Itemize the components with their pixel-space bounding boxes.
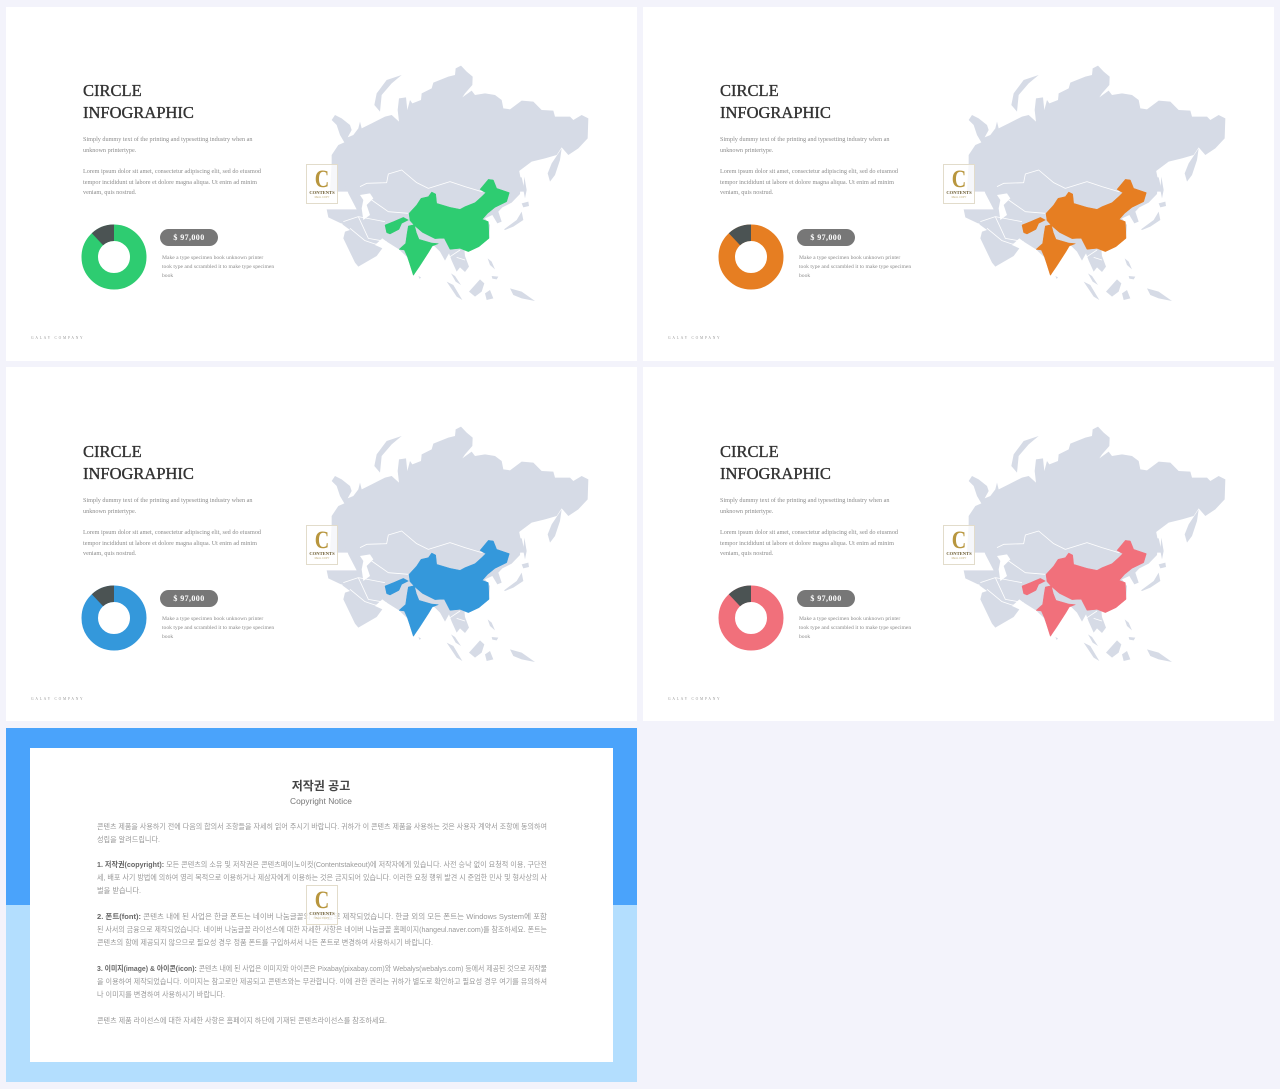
caption: book: [162, 273, 173, 279]
value pill: [797, 590, 855, 607]
title: CIRCLE: [720, 442, 779, 461]
map: Asia orange highlight: [964, 66, 1226, 301]
intro text: [83, 136, 252, 154]
intro text: Simply dummy text of the printing and typesetting industry when an: [720, 136, 889, 143]
value pill: [797, 229, 855, 246]
logo watermark: REAL COPY: [952, 196, 966, 199]
logo watermark: C: [315, 527, 329, 554]
caption: took type and scrambled it to make type specimen: [799, 264, 911, 270]
body text: tempor incididunt ut labore et dolore magna aliqua. Ut enim ad minim: [720, 178, 894, 186]
donut chart: [82, 224, 146, 290]
caption: took type and scrambled it to make type specimen: [162, 625, 274, 631]
footer: GALAY COMPANY: [31, 697, 84, 701]
notice heading: 저작권 공고: [292, 778, 350, 793]
title: INFOGRAPHIC: [83, 103, 194, 122]
logo watermark: CONTENTS: [946, 551, 972, 556]
footer: GALAY COMPANY: [31, 336, 84, 340]
body text: [720, 529, 898, 557]
panel: orange slide: [643, 7, 1274, 361]
value pill: $ 97,000: [810, 594, 842, 603]
intro text: [720, 497, 890, 514]
donut chart: [718, 224, 784, 290]
title: INFOGRAPHIC: [720, 103, 831, 122]
logo watermark: C: [952, 527, 966, 554]
caption: took type and scrambled it to make type specimen: [799, 625, 911, 631]
caption: took type and scrambled it to make type specimen: [162, 264, 274, 270]
logo watermark: [943, 525, 975, 565]
caption: [799, 255, 911, 279]
intro text: unknown printertype.: [83, 508, 136, 514]
clause 3: 3. 이미지(image) & 아이콘(icon): 콘텐츠 내에 된 사업은 이미지와 아이콘은 Pixabay(pixabay.com)와 Webalys(webalys.com) 등에서 제공된 것으로 저작물: [97, 963, 547, 973]
closing line: 콘텐츠 제품 라이선스에 대한 자세한 사항은 홈페이지 하단에 기재된 콘텐츠라이선스를 참조하세요.: [97, 1015, 387, 1025]
title: INFOGRAPHIC: [83, 464, 194, 483]
clause 1: 세, 배포 사기 방법에 의하여 영리 목적으로 이용하거나 제삼자에게 이용하는 것은 금지되어 있습니다. 이러한 요청 행위 발견 시 준엄한 민사 및 형사상의 사: [97, 872, 547, 882]
logo watermark: REAL COPY: [315, 917, 329, 920]
logo watermark: CONTENTS: [309, 551, 335, 556]
logo watermark: REAL COPY: [315, 196, 329, 199]
body text: [83, 529, 261, 557]
logo watermark: C: [315, 166, 329, 193]
body text: Lorem ipsum dolor sit amet, consectetur adipiscing elit, sed do eiusmod: [720, 529, 898, 536]
caption: Make a type specimen book unknown printer: [799, 616, 900, 622]
intro text: unknown printertype.: [720, 508, 773, 514]
title: [83, 442, 194, 483]
intro paragraph: [97, 821, 547, 844]
intro paragraph: 성립을 알려드립니다.: [97, 834, 160, 844]
logo watermark: CONTENTS: [309, 911, 335, 916]
panel: coral slide: [643, 367, 1274, 721]
panel: copyright notice: [6, 728, 637, 1082]
clause 2: 2. 폰트(font): 콘텐츠 내에 된 사업은 한글 폰트는 네이버 나눔글꼴의 저작물로 제작되었습니다. 한글 외의 모든 폰트는 Windows System에 포함: [97, 911, 547, 921]
caption: [799, 616, 911, 640]
logo watermark: CONTENTS: [946, 190, 972, 195]
clause 3: 을 이용하여 제작되었습니다. 이미지는 참고로만 제공되고 콘텐츠와는 무관합니다. 이에 관한 권리는 귀하가 별도로 확인하고 필요성 경우 여기를 유의하셔: [97, 976, 547, 986]
value pill: $ 97,000: [810, 233, 842, 242]
map: Asia green highlight: [326, 66, 588, 301]
logo watermark: REAL COPY: [952, 557, 966, 560]
body text: [720, 168, 898, 196]
title: INFOGRAPHIC: [720, 464, 831, 483]
clause 2: 된 사서의 금융으로 제작되었습니다. 네이버 나눔글꼴 라이선스에 대한 자세한 사항은 네이버 나눔글꼴 홈페이지(hangeul.naver.com)를 참조하세요. 폰트는: [97, 924, 547, 934]
body text: veniam, quis nostrud.: [83, 550, 136, 557]
value pill: $ 97,000: [173, 594, 205, 603]
map: Asia blue highlight: [326, 426, 588, 662]
body text: veniam, quis nostrud.: [720, 550, 773, 557]
title: CIRCLE: [83, 81, 142, 100]
clause 3: [97, 963, 547, 999]
caption: [162, 616, 274, 640]
donut chart: [82, 586, 146, 650]
value pill: [160, 229, 218, 246]
notice subheading: Copyright Notice: [290, 796, 352, 806]
intro text: Simply dummy text of the printing and typesetting industry when an: [83, 136, 252, 143]
body text: tempor incididunt ut labore et dolore magna aliqua. Ut enim ad minim: [720, 540, 894, 546]
clause 1: [97, 859, 547, 895]
body text: [83, 168, 261, 196]
body text: tempor incididunt ut labore et dolore magna aliqua. Ut enim ad minim: [83, 178, 257, 186]
logo watermark: CONTENTS: [309, 190, 335, 195]
body text: Lorem ipsum dolor sit amet, consectetur adipiscing elit, sed do eiusmod: [83, 168, 261, 175]
clause 1: 벌을 받습니다.: [97, 885, 141, 895]
clause 2: 콘텐츠의 함에 제공되지 않으므로 필요성 경우 정품 폰트를 구입하셔서 나든 폰트로 변경하여 사용하시기 바랍니다.: [97, 937, 433, 947]
intro text: [83, 497, 252, 514]
caption: book: [162, 634, 173, 640]
body text: Lorem ipsum dolor sit amet, consectetur adipiscing elit, sed do eiusmod: [720, 168, 898, 175]
clause 3: 나 이미지를 변경하여 사용하시기 바랍니다.: [97, 989, 225, 999]
body text: veniam, quis nostrud.: [83, 189, 136, 196]
value pill: $ 97,000: [173, 233, 205, 242]
caption: Make a type specimen book unknown printer: [162, 616, 263, 622]
body text: tempor incididunt ut labore et dolore magna aliqua. Ut enim ad minim: [83, 540, 257, 546]
intro paragraph: 콘텐츠 제품을 사용하기 전에 다음의 합의서 조항들을 자세히 읽어 주시기 바랍니다. 귀하가 이 콘텐츠 제품을 사용하는 것은 사용자 계약서 조항에 동의하여: [97, 821, 547, 831]
body text: Lorem ipsum dolor sit amet, consectetur adipiscing elit, sed do eiusmod: [83, 529, 261, 536]
white notice card: [30, 748, 613, 1062]
panel: blue slide: [6, 367, 637, 721]
clause 1: 1. 저작권(copyright): 모든 콘텐츠의 소유 및 저작권은 콘텐츠메이노이컷(Contentstakeout)에 저작자에게 있습니다. 사전 승낙 없이 요청적 이용, 구단전: [97, 859, 547, 869]
footer: GALAY COMPANY: [668, 697, 721, 701]
donut chart: [718, 586, 784, 650]
caption: Make a type specimen book unknown printer: [162, 255, 263, 261]
logo watermark: REAL COPY: [315, 557, 329, 560]
caption: [162, 255, 274, 279]
title: [720, 81, 831, 122]
caption: book: [799, 273, 810, 279]
panel: green slide: [6, 7, 637, 361]
intro text: Simply dummy text of the printing and typesetting industry when an: [720, 497, 889, 504]
body text: veniam, quis nostrud.: [720, 189, 773, 196]
intro text: [720, 136, 890, 154]
title: [720, 442, 831, 483]
logo watermark: [943, 164, 975, 204]
blue header band: [6, 728, 637, 905]
footer: GALAY COMPANY: [668, 336, 721, 340]
intro text: unknown printertype.: [720, 146, 773, 154]
caption: Make a type specimen book unknown printer: [799, 255, 900, 261]
caption: book: [799, 634, 810, 640]
logo watermark: [306, 885, 338, 925]
notice text: [97, 778, 547, 1025]
map: Asia coral highlight: [964, 426, 1226, 662]
logo watermark: C: [315, 887, 329, 914]
title: [83, 81, 194, 122]
title: CIRCLE: [720, 81, 779, 100]
value pill: [160, 590, 218, 607]
clause 2: [97, 911, 547, 947]
title: CIRCLE: [83, 442, 142, 461]
intro text: unknown printertype.: [83, 146, 136, 154]
logo watermark: [306, 525, 338, 565]
intro text: Simply dummy text of the printing and typesetting industry when an: [83, 497, 252, 504]
logo watermark: C: [952, 166, 966, 193]
logo watermark: [306, 164, 338, 204]
